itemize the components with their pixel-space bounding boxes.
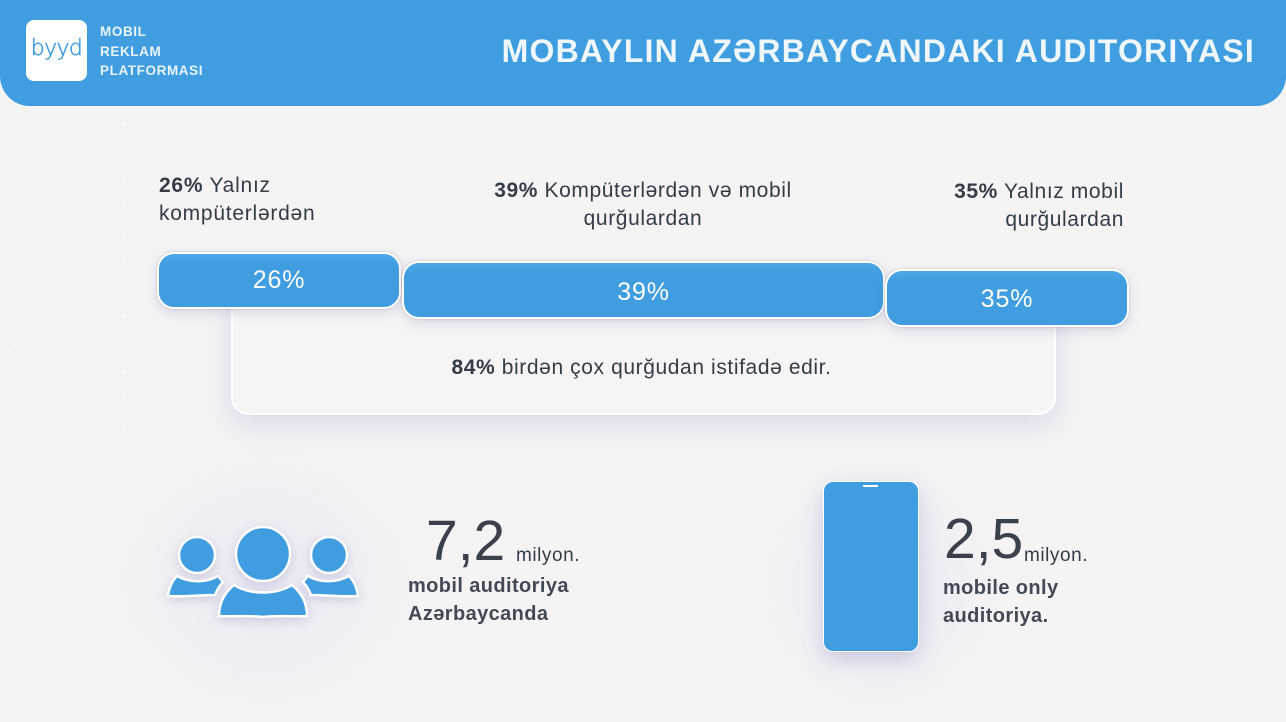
label: 26% computers only [159, 174, 315, 225]
label: 39% both: 39% Kompüterlərdən və mobil [494, 179, 792, 202]
description: auditoriya. [943, 605, 1049, 627]
bar: 26% [157, 252, 401, 309]
label: 35% mobile only [954, 180, 1124, 231]
description: Azərbaycanda [408, 603, 548, 625]
bar: 35%: 35% [981, 285, 1033, 313]
label: 39% both: qurğulardan [584, 207, 702, 230]
stat: 2,5 milyon [943, 507, 1088, 627]
description: mobile only [943, 577, 1059, 599]
label: 35% mobile only: qurğulardan [1005, 208, 1124, 231]
label: 35% mobile only: 35% Yalnız mobil [954, 180, 1124, 203]
callout text: 84% birdən çox qurğudan istifadə edir. [451, 356, 832, 379]
label: 26% computers only: kompüterlərdən [159, 202, 315, 225]
platform name: MOBIL [100, 24, 146, 39]
logo wordmark: byyd [31, 36, 82, 61]
logo tile [26, 20, 87, 81]
panel: multi-device callout [231, 290, 1056, 415]
number: 2,5 [944, 507, 1023, 571]
unit: milyon. [516, 545, 580, 566]
bar: 26%: 26% [253, 266, 305, 294]
left person [168, 537, 223, 596]
platform name: PLATFORMASI [100, 63, 203, 78]
stat: 7,2 milyon [408, 509, 580, 625]
bar: 39% [402, 261, 885, 319]
label: 39% both [494, 179, 792, 230]
right person [303, 537, 358, 596]
description [408, 575, 569, 625]
icon: phone [823, 481, 919, 652]
platform name: REKLAM [100, 44, 161, 58]
description: mobil auditoriya [408, 575, 569, 597]
phone speaker [863, 485, 878, 487]
bar: 35% [885, 269, 1129, 327]
title: MOBAYLIN AZƏRBAYCANDAKI AUDITORIYASI [502, 33, 1255, 69]
label: 26% computers only: 26% Yalnız [159, 174, 271, 197]
number: 7,2 [426, 509, 505, 573]
platform name [100, 24, 203, 78]
bar: 39%: 39% [617, 278, 670, 306]
centre person [219, 527, 307, 617]
description [943, 577, 1059, 627]
icon: audience [164, 526, 362, 624]
unit: milyon. [1024, 545, 1088, 566]
header band [0, 0, 1286, 106]
